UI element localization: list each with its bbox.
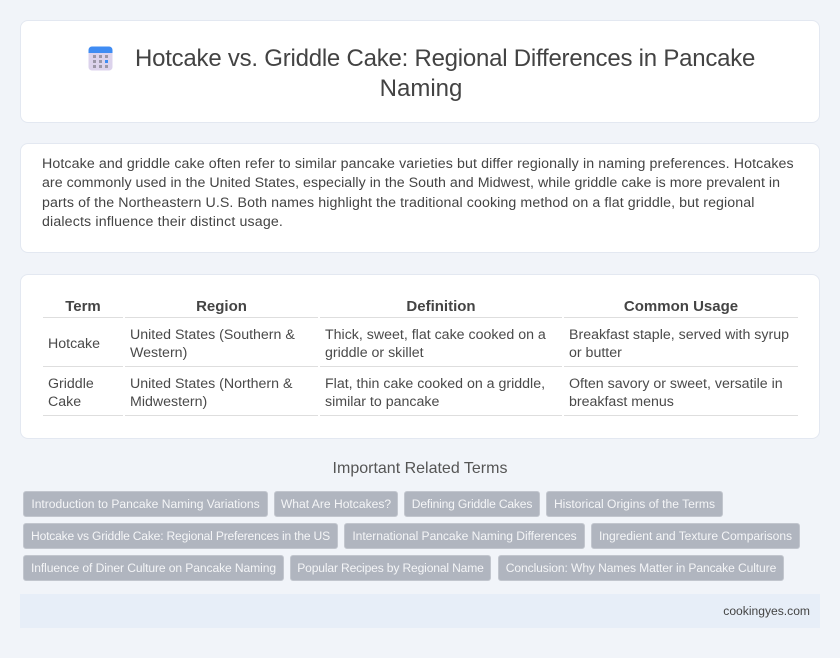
table row: Hotcake: Breakfast staple, served with syrup	[569, 327, 789, 343]
tag	[546, 491, 723, 517]
tag: Historical Origins of the Terms	[554, 497, 715, 511]
table row: Griddle Cake: United States (Northern &	[130, 376, 292, 392]
tag	[498, 555, 784, 581]
tag: Conclusion: Why Names Matter in Pancake Culture	[506, 561, 776, 575]
table row: Griddle Cake: Midwestern)	[130, 394, 207, 410]
tag: What Are Hotcakes?	[281, 497, 391, 511]
table header: Region	[196, 298, 247, 315]
tag: Popular Recipes by Regional Name	[297, 561, 484, 575]
tag: Influence of Diner Culture on Pancake Naming	[31, 561, 276, 575]
table row: Griddle Cake	[43, 376, 798, 416]
table header	[43, 298, 798, 318]
tag	[23, 555, 284, 581]
tag	[23, 491, 268, 517]
title: Hotcake vs. Griddle Cake: Regional Differences in Pancake	[135, 45, 755, 72]
table row: Griddle Cake: similar to pancake	[325, 394, 439, 410]
tag: Introduction to Pancake Naming Variations	[31, 497, 260, 511]
table row: Griddle Cake: Flat, thin cake cooked on a griddle,	[325, 376, 545, 392]
tag	[344, 523, 585, 549]
table row: Griddle Cake: breakfast menus	[569, 394, 674, 410]
intro text: parts of the Northeastern U.S. Both names highlight the traditional cooking method on a flat griddle, but regional	[42, 195, 755, 211]
heading: related terms: Important Related Terms	[333, 460, 507, 477]
table row: Griddle Cake: Griddle	[48, 376, 94, 392]
table row: Hotcake: or butter	[569, 345, 622, 361]
table row: Hotcake	[43, 327, 798, 367]
intro text: are commonly used in the United States, especially in the South and Midwest, while griddle cake is more prevalent in	[42, 175, 780, 191]
footer	[20, 594, 820, 628]
panel: introduction	[20, 143, 820, 253]
icon: calendar	[88, 46, 112, 70]
intro text	[42, 156, 794, 230]
table row: Griddle Cake: Often savory or sweet, versatile in	[569, 376, 783, 392]
intro text: dialects influence their distinct usage.	[42, 214, 283, 230]
panel: header	[20, 20, 820, 123]
panel: comparison table	[20, 274, 820, 439]
intro text: Hotcake and griddle cake often refer to similar pancake varieties but differ regionally in naming preferences. Hotcakes	[42, 156, 794, 172]
table header: Definition	[406, 298, 476, 315]
tag	[274, 491, 398, 517]
tag: Defining Griddle Cakes	[412, 497, 532, 511]
title: Naming	[380, 75, 462, 102]
table row: Hotcake: griddle or skillet	[325, 345, 424, 361]
table row: Hotcake: Thick, sweet, flat cake cooked on a	[325, 327, 546, 343]
tag	[404, 491, 540, 517]
tag	[290, 555, 491, 581]
tag: International Pancake Naming Differences	[352, 529, 577, 543]
table row: Hotcake: Western)	[130, 345, 187, 361]
tag list: related terms	[23, 491, 800, 581]
tag	[23, 523, 338, 549]
tag: Hotcake vs Griddle Cake: Regional Preferences in the US	[31, 529, 330, 543]
table row: Hotcake: Hotcake	[48, 336, 100, 352]
source credit: cookingyes.com	[723, 604, 810, 618]
table row: Griddle Cake: Cake	[48, 394, 81, 410]
tag	[591, 523, 800, 549]
table header: Common Usage	[624, 298, 738, 315]
tag: Ingredient and Texture Comparisons	[599, 529, 792, 543]
table row: Hotcake: United States (Southern &	[130, 327, 295, 343]
title	[135, 45, 755, 102]
table header: Term	[65, 298, 101, 315]
